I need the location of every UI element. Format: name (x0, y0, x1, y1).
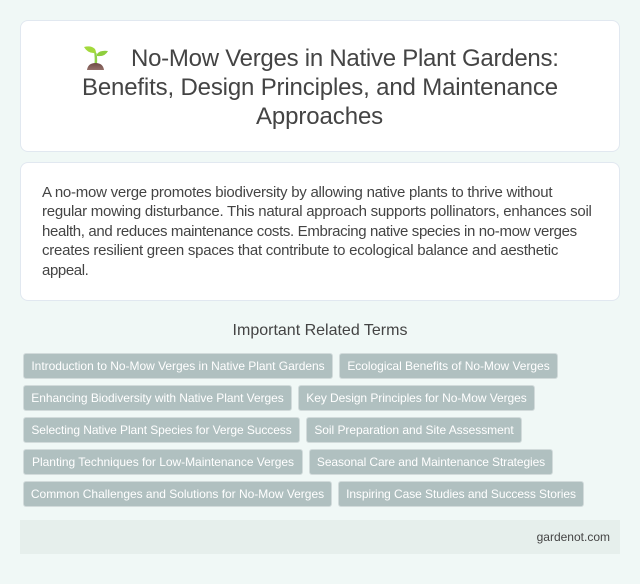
intro paragraph: health, and reduces maintenance costs. Embracing native species in no-mow verges (42, 223, 577, 240)
chip (23, 481, 332, 507)
title: No-Mow Verges in Native Plant Gardens: (131, 45, 559, 72)
chip: Soil Preparation and Site Assessment (314, 423, 514, 437)
icon: seedling (84, 46, 108, 70)
chip (298, 385, 535, 411)
chip: Common Challenges and Solutions for No-Mow Verges (31, 487, 324, 501)
chip: Introduction to No-Mow Verges in Native Plant Gardens (31, 359, 325, 373)
chip: Enhancing Biodiversity with Native Plant Verges (31, 391, 284, 405)
intro paragraph: creates resilient green spaces that contribute to ecological balance and aesthetic (42, 242, 558, 259)
term chips (23, 353, 584, 507)
chip (306, 417, 522, 443)
heading: important related terms: Important Related Terms (233, 322, 407, 339)
chip: Ecological Benefits of No-Mow Verges (347, 359, 550, 373)
chip (23, 353, 333, 379)
chip: Selecting Native Plant Species for Verge Success (31, 423, 292, 437)
footer source: gardenot.com (537, 530, 610, 544)
chip (23, 385, 292, 411)
chip (338, 481, 584, 507)
chip: Seasonal Care and Maintenance Strategies (317, 455, 545, 469)
title: Benefits, Design Principles, and Maintenance (82, 74, 558, 101)
title (82, 45, 559, 130)
panel: title card (20, 20, 620, 152)
chip (339, 353, 558, 379)
title: Approaches (256, 103, 383, 130)
intro paragraph (42, 184, 592, 279)
chip (23, 417, 300, 443)
chip (309, 449, 553, 475)
panel: introduction (20, 162, 620, 301)
intro paragraph: appeal. (42, 262, 88, 279)
chip: Key Design Principles for No-Mow Verges (306, 391, 527, 405)
intro paragraph: A no-mow verge promotes biodiversity by allowing native plants to thrive without (42, 184, 552, 201)
footer bar (20, 520, 620, 554)
chip (23, 449, 303, 475)
chip: Inspiring Case Studies and Success Stories (346, 487, 576, 501)
chip: Planting Techniques for Low-Maintenance Verges (32, 455, 294, 469)
intro paragraph: regular mowing disturbance. This natural approach supports pollinators, enhances soil (42, 203, 592, 220)
